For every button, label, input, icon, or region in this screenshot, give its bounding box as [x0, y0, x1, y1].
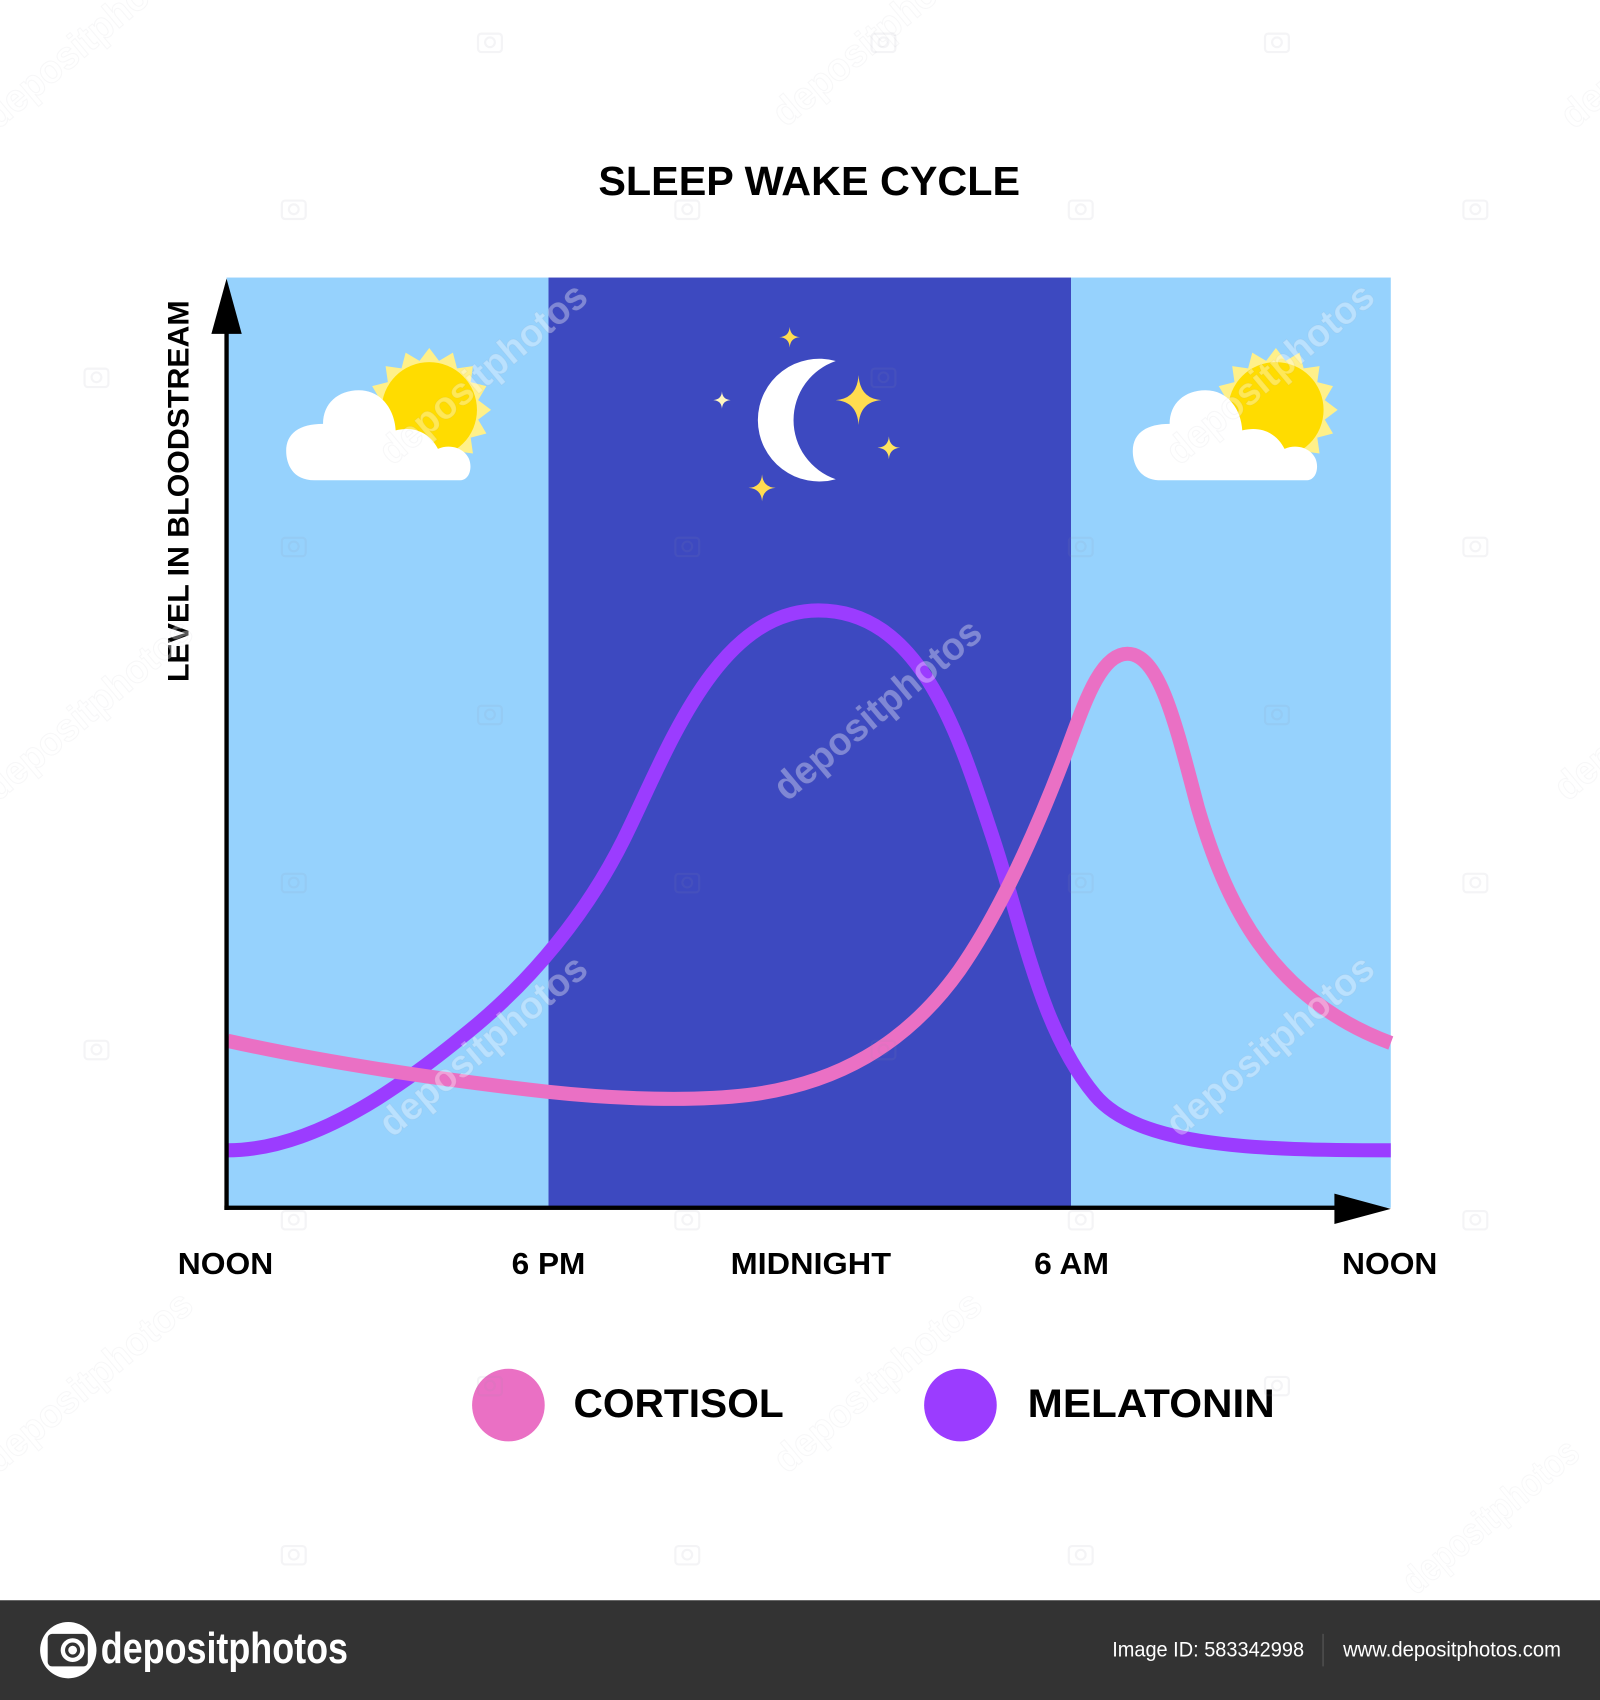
legend: MELATONIN: [1028, 1382, 1275, 1426]
title: SLEEP WAKE CYCLE: [598, 158, 1020, 204]
x axis labels: NOON: [178, 1248, 273, 1281]
watermarks: depositphotos: [371, 946, 596, 1145]
icon: moon and stars: [713, 327, 900, 501]
icon: camera logo: [40, 1622, 96, 1678]
chart: [211, 278, 1391, 1224]
legend: CORTISOL: [573, 1382, 784, 1426]
x axis labels: 6 PM: [512, 1248, 585, 1281]
watermarks: depositphotos: [1158, 274, 1383, 473]
watermarks: depositphotos: [371, 274, 596, 473]
panel: daytime left: [227, 278, 549, 1208]
x axis labels: NOON: [1342, 1248, 1437, 1281]
watermark camera icons: [85, 34, 1487, 1564]
x axis arrow: [224, 1194, 1391, 1224]
logo wordmark: depositphotos: [101, 1625, 348, 1673]
watermarks: depositphotos: [1158, 946, 1383, 1145]
x axis labels: MIDNIGHT: [731, 1248, 892, 1281]
melatonin curve: [228, 610, 1391, 1150]
image id: Image ID: 583342998: [1112, 1637, 1304, 1662]
y axis arrow: [211, 279, 242, 1210]
icon: sun behind cloud left: [286, 348, 491, 480]
legend: [472, 1369, 1275, 1441]
watermarks: depositphotos: [765, 1283, 990, 1481]
cortisol curve: [228, 654, 1391, 1099]
x axis labels: 6 AM: [1034, 1248, 1109, 1281]
website: www.depositphotos.com: [1342, 1637, 1561, 1662]
y axis label: LEVEL IN BLOODSTREAM: [164, 300, 196, 682]
watermarks: depositphotos: [765, 610, 990, 809]
icon: sun behind cloud right: [1133, 348, 1338, 480]
panel: night: [549, 278, 1071, 1208]
panel: daytime right: [1071, 278, 1391, 1208]
x axis labels: [178, 1248, 1437, 1281]
footer bar: [0, 1600, 1600, 1700]
